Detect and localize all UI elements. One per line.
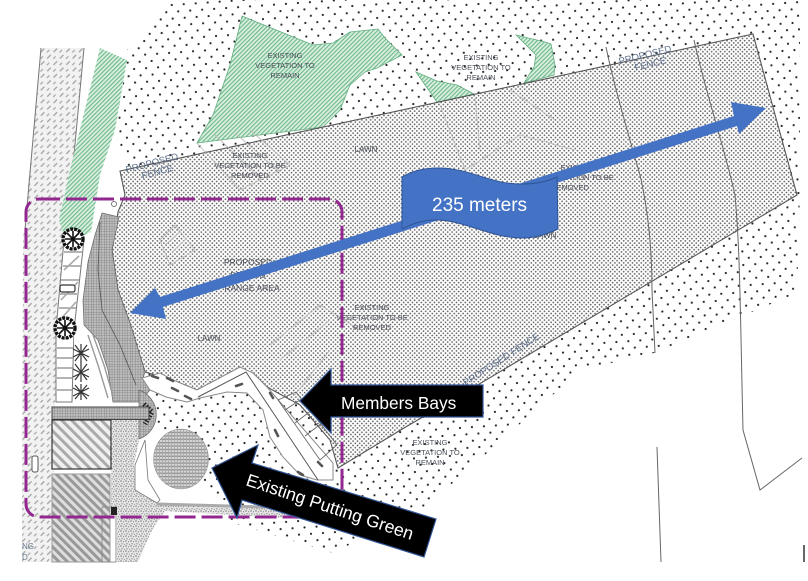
- label: proposed range area: PROPOSED: [224, 257, 272, 267]
- green area: vegetation strip: [59, 48, 127, 235]
- label: vegetation to be removed (left): VEGETATION TO BE: [214, 161, 286, 170]
- label: vegetation to remain (small): REMAIN: [466, 73, 496, 82]
- hitting bays: curved grey band: [83, 202, 150, 402]
- label: proposed fence left: PROPOSED: [125, 151, 180, 176]
- label: vegetation to be removed (centre): EXISTING: [354, 303, 390, 312]
- label: vegetation to be removed (centre): REMOVED: [353, 323, 392, 332]
- wavy banner: 235 meters: 235 meters: [432, 195, 527, 216]
- purple dashed study area outline: [26, 199, 342, 517]
- label: proposed fence right: FENCE: [634, 55, 667, 74]
- label: vegetation to remain (large): VEGETATION TO: [255, 61, 315, 70]
- label: vegetation to be removed (right): REMOVED: [551, 183, 590, 192]
- survey lines across the site: [606, 40, 804, 562]
- label: lawn top: LAWN: [355, 145, 378, 154]
- green area: curved vegetation patch: [516, 35, 555, 83]
- hatched building block lower: [52, 474, 110, 562]
- label: proposed fence left: [125, 151, 182, 186]
- label: proposed range area: RANGE AREA: [224, 283, 280, 293]
- small car icon: [32, 456, 38, 472]
- lawn area with proposed fence outline: [112, 34, 797, 468]
- label: vegetation to be removed (left): REMOVED: [231, 171, 270, 180]
- label: proposed fence left: FENCE: [141, 163, 175, 182]
- label: cropped drawing text: D: [22, 553, 28, 562]
- hatched building block upper: [52, 420, 111, 469]
- label: vegetation to remain (small): EXISTING: [463, 53, 499, 62]
- building crossbar: [52, 407, 149, 420]
- palm plantings: [73, 344, 89, 400]
- faint existing vegetation linework: [160, 90, 575, 395]
- label: vegetation to be removed (left): EXISTING: [232, 151, 268, 160]
- green area: small vegetation patch: [416, 72, 474, 102]
- white cart path with sparse dots interior: [135, 367, 333, 508]
- member bay stalls: [278, 392, 337, 460]
- label: vegetation to remain (large): REMAIN: [270, 71, 300, 80]
- gate marker: [102, 507, 117, 562]
- label: vegetation to remain (bottom): REMAIN: [415, 458, 445, 467]
- label: vegetation to be removed (right): VEGETATION TO BE: [542, 173, 614, 182]
- callout arrow: Members Bays: [300, 369, 483, 433]
- label: vegetation to remain (bottom): VEGETATION TO: [400, 448, 460, 457]
- green area: large vegetation to remain: [197, 16, 402, 143]
- callout arrow: Existing Putting Green: [212, 445, 436, 557]
- label: vegetation to remain (small): VEGETATION TO: [451, 63, 511, 72]
- label: proposed fence lower: PROPOSED FENCE: [461, 331, 542, 389]
- blue double-headed distance arrow: [130, 102, 766, 319]
- label: vegetation to be removed (centre): VEGETATION TO BE: [336, 313, 408, 322]
- label: lawn lower: LAWN: [198, 334, 221, 343]
- tree: lower: [55, 318, 75, 338]
- label: lawn right: LAWN: [534, 231, 557, 240]
- label: vegetation to remain (bottom): EXISTING: [412, 438, 448, 447]
- tree: upper: [63, 229, 83, 249]
- label: vegetation to be removed (right): EXISTING: [560, 163, 596, 172]
- round deck: [139, 390, 156, 439]
- label: vegetation to remain (large): EXISTING: [267, 51, 303, 60]
- label: proposed fence right: PROPOSED: [618, 44, 673, 67]
- wavy banner: 235 meters: [402, 168, 558, 238]
- existing putting green: [154, 429, 208, 489]
- parked car: [60, 285, 75, 292]
- label: cropped drawing text: NG: [22, 542, 34, 551]
- white clearing beside the fence start: [92, 130, 126, 235]
- stippled paving: [111, 408, 320, 562]
- road strip on the left: [22, 48, 84, 562]
- callout arrow: Existing Putting Green: Existing Putting Green: [244, 470, 416, 544]
- label: proposed fence right: [618, 44, 675, 77]
- parking ladder and planting: [56, 240, 112, 403]
- label: proposed range area: DRIVING: [230, 270, 266, 280]
- callout arrow: Members Bays: Members Bays: [341, 393, 457, 413]
